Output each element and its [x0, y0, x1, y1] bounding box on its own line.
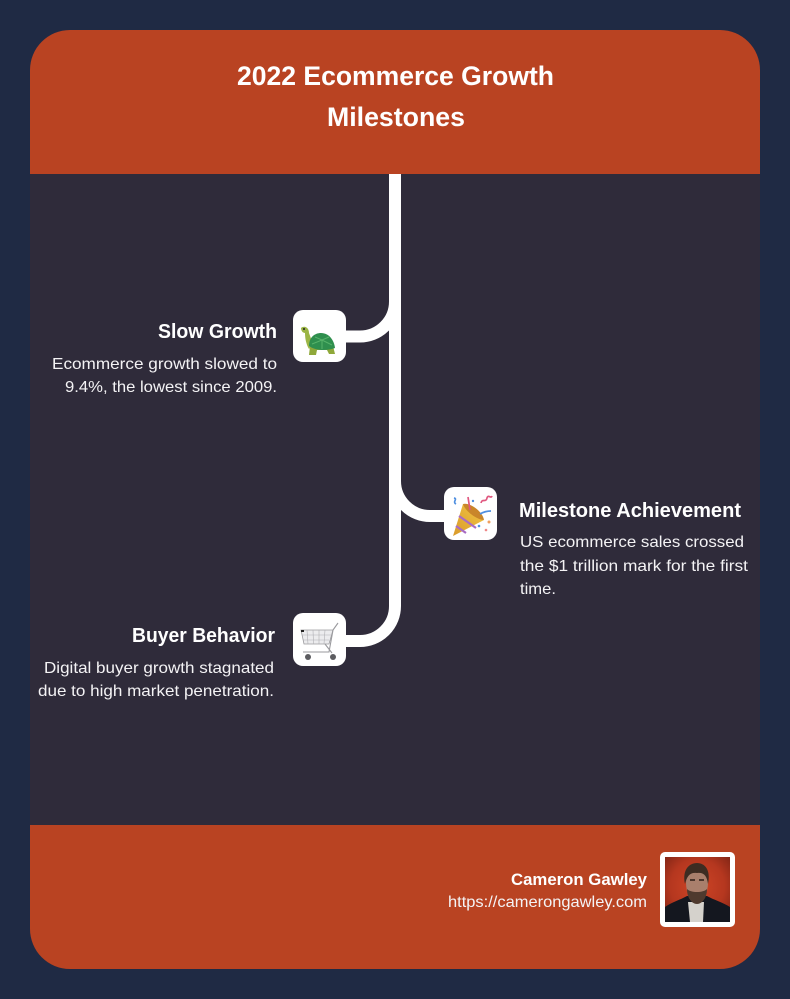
author name and url — [448, 870, 648, 911]
panel: timeline body — [30, 174, 760, 825]
text block — [520, 534, 749, 598]
author name and url: Cameron Gawley — [511, 870, 648, 889]
text block — [52, 356, 277, 396]
heading: Buyer Behavior — [132, 625, 275, 647]
author portrait — [660, 852, 735, 927]
title — [237, 61, 554, 132]
timeline line with connectors — [340, 174, 450, 641]
text block: 9.4%, the lowest since 2009. — [65, 379, 277, 396]
text block: US ecommerce sales crossed — [520, 534, 744, 551]
title: 2022 Ecommerce Growth — [237, 61, 554, 91]
text block: Ecommerce growth slowed to — [52, 356, 277, 373]
icon: shopping cart — [293, 613, 346, 666]
milestone: buyer behavior — [38, 613, 346, 700]
text block: Digital buyer growth stagnated — [44, 660, 274, 677]
milestone: achievement — [444, 487, 749, 598]
icon: turtle — [293, 310, 346, 362]
author name and url: https://camerongawley.com — [448, 894, 647, 911]
panel: footer band — [30, 825, 760, 969]
milestone: slow growth — [52, 310, 346, 396]
title: Milestones — [327, 102, 465, 132]
panel: header band — [30, 30, 760, 174]
heading: Milestone Achievement — [519, 500, 741, 522]
text block: time. — [520, 581, 556, 598]
heading: Slow Growth — [158, 321, 277, 343]
text block: due to high market penetration. — [38, 683, 274, 700]
icon: party popper — [444, 487, 497, 540]
text block: the $1 trillion mark for the first — [520, 558, 749, 575]
text block — [38, 660, 274, 700]
